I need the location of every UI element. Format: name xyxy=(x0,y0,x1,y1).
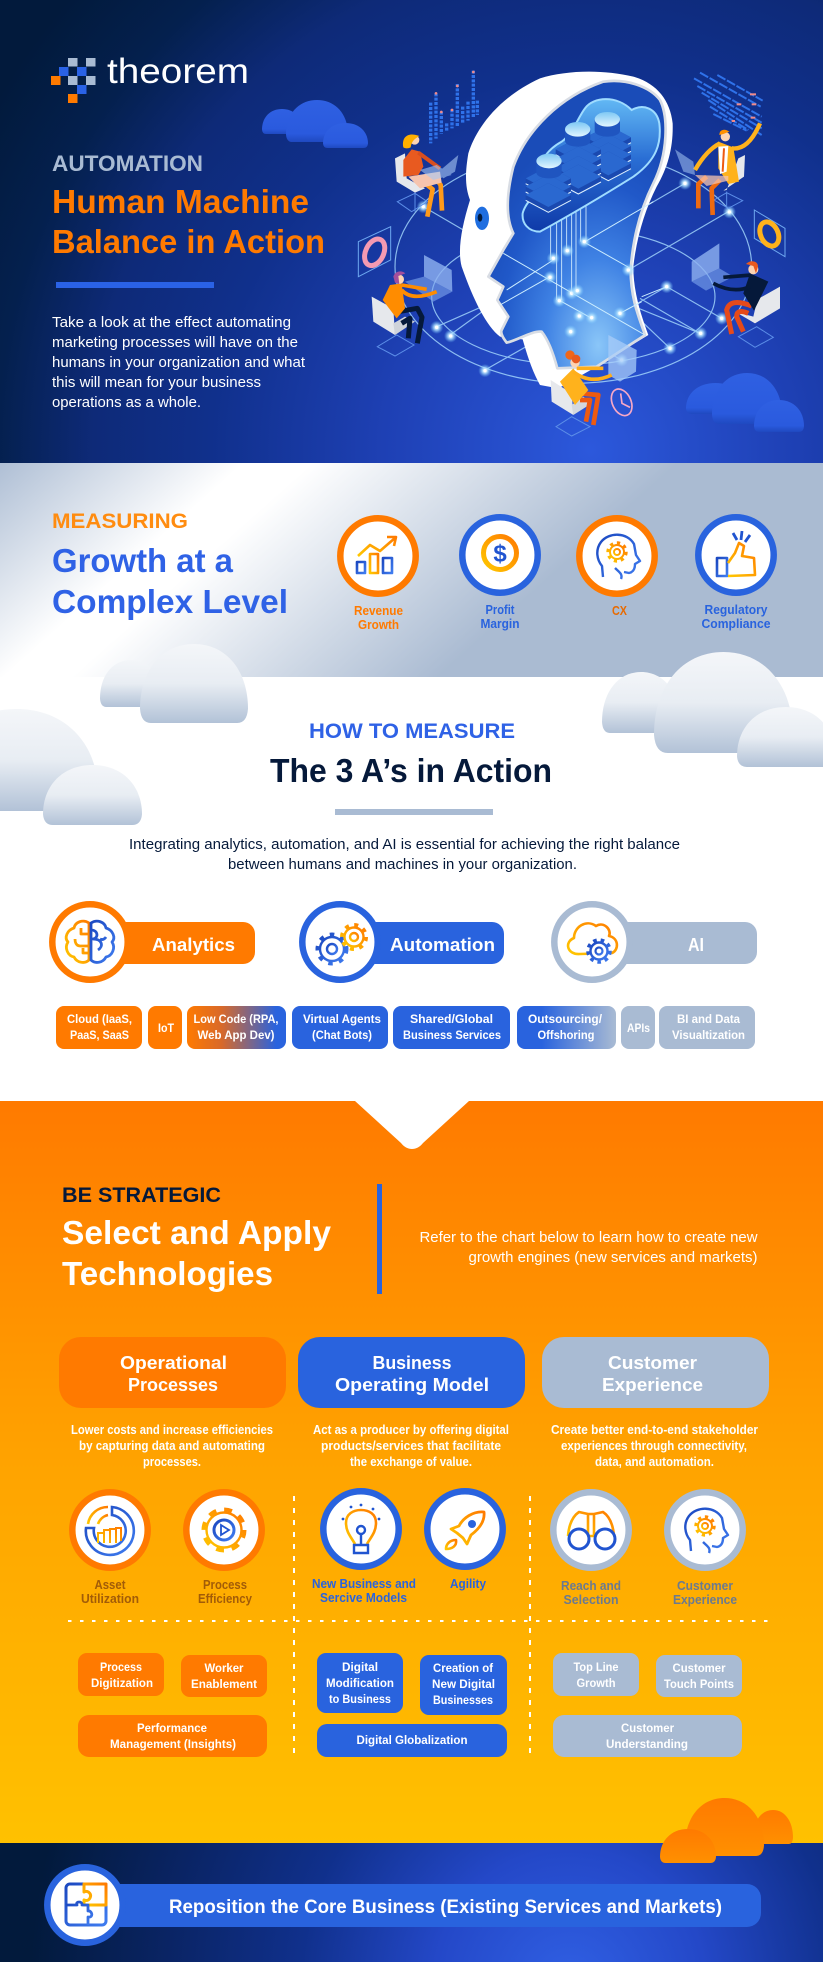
column descriptions: the exchange of value. xyxy=(350,1455,472,1469)
tags: business: Creation of xyxy=(433,1661,494,1675)
tags: business: to Business xyxy=(329,1692,391,1706)
person: woman top-left xyxy=(395,134,458,217)
capability: customer experience: Customer xyxy=(677,1578,733,1593)
column header: business operating model xyxy=(298,1337,525,1408)
eyebrow: automation: AUTOMATION xyxy=(52,151,203,176)
intro paragraph xyxy=(129,836,680,873)
tag row: technologies: IoT xyxy=(158,1021,175,1035)
capability: customer experience xyxy=(667,1492,743,1607)
data wires xyxy=(551,205,586,300)
icon: radial chart xyxy=(86,1507,134,1555)
tags: customer: Customer xyxy=(621,1721,674,1735)
capability: asset utilization: Asset xyxy=(94,1577,126,1592)
title: the 3 A's in action: The 3 A’s in Action xyxy=(270,752,552,789)
tags: operational: Management (Insights) xyxy=(110,1737,236,1751)
icon: gear with play xyxy=(204,1510,244,1550)
person: man left xyxy=(372,255,452,356)
capability: new business and service models xyxy=(312,1491,416,1605)
head silhouette xyxy=(460,72,673,388)
capability: process efficiency: Efficiency xyxy=(198,1591,253,1606)
title: growth at a complex level: Growth at a xyxy=(52,542,234,579)
tag row: technologies: Visualtization xyxy=(672,1028,745,1042)
icon: gears xyxy=(318,925,366,964)
metric: profit margin xyxy=(462,517,538,631)
title: select and apply technologies xyxy=(62,1214,332,1292)
tag row: technologies: Low Code (RPA, xyxy=(194,1012,278,1026)
capability: reach and selection: Reach and xyxy=(561,1578,621,1593)
icon: head with gear xyxy=(597,535,640,579)
column header: business operating model: Business xyxy=(372,1353,452,1373)
capability: customer experience: Experience xyxy=(673,1592,737,1607)
code block graphic xyxy=(694,73,763,135)
footer background xyxy=(0,1843,823,1962)
column header: business operating model: Operating Model xyxy=(335,1375,489,1395)
tag row: technologies: Outsourcing/ xyxy=(528,1012,603,1026)
hero title: Balance in Action xyxy=(52,223,325,260)
title: select and apply technologies: Technologies xyxy=(62,1255,273,1292)
hero paragraph: this will mean for your business xyxy=(52,374,261,391)
metric: profit margin: Profit xyxy=(486,602,515,617)
tags: operational: Performance xyxy=(137,1721,207,1735)
tag row: technologies: Virtual Agents xyxy=(303,1012,381,1026)
column descriptions: experiences through connectivity, xyxy=(561,1439,747,1453)
metric: revenue growth xyxy=(340,518,416,632)
capability: asset utilization: Utilization xyxy=(81,1591,139,1606)
orange section background with notch xyxy=(0,1101,823,1843)
metric: regulatory compliance xyxy=(698,517,774,631)
cloud: hero bottom xyxy=(686,373,804,432)
tags: operational: Enablement xyxy=(191,1677,257,1691)
eyebrow: be strategic: BE STRATEGIC xyxy=(62,1184,221,1207)
illustration: AI head with people and circuit xyxy=(358,71,785,436)
tag row: technologies: Shared/Global xyxy=(410,1012,493,1026)
inner circuit on face xyxy=(500,202,667,335)
white clouds left top xyxy=(100,644,248,723)
column descriptions: Lower costs and increase efficiencies xyxy=(71,1423,273,1437)
column descriptions: by capturing data and automating xyxy=(79,1439,265,1453)
hero paragraph: Take a look at the effect automating xyxy=(52,314,291,331)
ring panel right xyxy=(754,210,785,257)
logo: theorem xyxy=(51,52,249,103)
white clouds left xyxy=(0,709,142,825)
tag row: technologies: Web App Dev) xyxy=(198,1028,275,1042)
tags: customer: Touch Points xyxy=(664,1677,734,1691)
icon: head with gear xyxy=(685,1509,728,1553)
column header: customer experience xyxy=(542,1337,769,1408)
tag row: technologies: Business Services xyxy=(403,1028,501,1042)
capability: process efficiency xyxy=(186,1492,262,1606)
capability: new business and service models: Sercive Models xyxy=(320,1590,407,1605)
pill: automation: Automation xyxy=(390,935,495,955)
tags: business xyxy=(317,1653,507,1757)
tags: customer xyxy=(553,1653,742,1757)
hero paragraph xyxy=(52,314,306,411)
pill: ai: AI xyxy=(688,935,704,955)
column header: operational processes xyxy=(59,1337,286,1408)
pill: automation xyxy=(302,904,504,980)
column descriptions: Act as a producer by offering digital xyxy=(313,1423,509,1437)
eyebrow: how to measure: HOW TO MEASURE xyxy=(309,720,515,743)
title: growth at a complex level xyxy=(52,542,288,620)
band: measuring background xyxy=(0,463,823,677)
hero paragraph: humans in your organization and what xyxy=(52,354,306,371)
tag row: technologies: APIs xyxy=(627,1021,650,1035)
column descriptions xyxy=(71,1423,758,1469)
metric: cx xyxy=(579,518,655,618)
capability: process efficiency: Process xyxy=(203,1577,247,1592)
metric: revenue growth: Growth xyxy=(358,617,399,632)
circuit rings and lines xyxy=(395,150,752,383)
orange clouds xyxy=(660,1798,793,1863)
metric: profit margin: Margin xyxy=(480,616,520,631)
column descriptions: processes. xyxy=(143,1455,201,1469)
icon: bars and arrow xyxy=(357,537,396,573)
icon: thumbs up xyxy=(717,531,755,576)
hero paragraph: operations as a whole. xyxy=(52,394,201,411)
hero accent bar xyxy=(56,282,214,288)
capability: new business and service models: New Business and xyxy=(312,1576,416,1591)
chart intro text: growth engines (new services and markets) xyxy=(468,1249,758,1266)
pill: analytics xyxy=(52,904,255,980)
hero title: Human Machine xyxy=(52,183,309,220)
tags: business: Businesses xyxy=(433,1693,493,1707)
person: man top-right xyxy=(675,123,760,215)
bar cluster graphic xyxy=(431,71,477,143)
ring panel left xyxy=(358,227,391,277)
person: woman bottom xyxy=(551,335,637,436)
eyebrow: measuring: MEASURING xyxy=(52,510,188,533)
column descriptions: Create better end-to-end stakeholder xyxy=(551,1423,758,1437)
brain cloud with servers xyxy=(523,99,660,232)
chart intro text xyxy=(420,1229,758,1266)
person: man right xyxy=(692,243,780,347)
chart intro text: Refer to the chart below to learn how to create new xyxy=(420,1229,758,1246)
logo: theorem: theorem xyxy=(107,52,249,91)
pill: analytics: Analytics xyxy=(152,935,235,955)
icon: cloud gear xyxy=(568,923,617,962)
tag row: technologies: PaaS, SaaS xyxy=(70,1028,129,1042)
eye xyxy=(475,207,489,230)
capability: agility xyxy=(427,1491,503,1591)
icon: puzzle xyxy=(66,1884,106,1925)
icon: binoculars xyxy=(568,1512,615,1549)
tags: business: Digital xyxy=(342,1660,378,1674)
column header: customer experience: Experience xyxy=(602,1375,703,1395)
tags: customer: Top Line xyxy=(574,1660,619,1674)
metric: cx: CX xyxy=(612,603,627,618)
capability: asset utilization xyxy=(72,1492,148,1606)
capability: agility: Agility xyxy=(450,1576,487,1591)
tags: customer: Understanding xyxy=(606,1737,688,1751)
tag row: technologies xyxy=(56,1006,755,1049)
hero background xyxy=(0,0,823,463)
title: growth at a complex level: Complex Level xyxy=(52,583,288,620)
footer banner: reposition the core business xyxy=(47,1867,761,1943)
column descriptions: data, and automation. xyxy=(595,1455,714,1469)
capability: reach and selection xyxy=(553,1492,629,1607)
capability: reach and selection: Selection xyxy=(564,1592,619,1607)
metric: revenue growth: Revenue xyxy=(354,603,403,618)
tag row: technologies: Offshoring xyxy=(538,1028,594,1042)
metric: regulatory compliance: Regulatory xyxy=(704,602,768,617)
clock xyxy=(607,386,636,419)
tags: operational xyxy=(78,1653,267,1757)
icon: dollar coin: $ xyxy=(493,540,507,568)
cloud: hero top xyxy=(262,100,368,148)
tags: business: Digital Globalization xyxy=(356,1733,468,1747)
circuit nodes xyxy=(417,177,736,377)
title divider xyxy=(335,809,493,815)
hero title xyxy=(52,183,325,260)
icon: rocket xyxy=(446,1512,484,1549)
column header: operational processes: Processes xyxy=(128,1375,218,1395)
tag row: technologies: (Chat Bots) xyxy=(312,1028,372,1042)
icon: light bulb xyxy=(342,1504,380,1553)
column descriptions: products/services that facilitate xyxy=(321,1439,501,1453)
title: select and apply technologies: Select and Apply xyxy=(62,1214,332,1251)
metric: regulatory compliance: Compliance xyxy=(702,616,770,631)
tags: operational: Worker xyxy=(204,1661,244,1675)
tags: customer: Customer xyxy=(672,1661,726,1675)
white clouds right xyxy=(602,652,823,767)
intro paragraph: Integrating analytics, automation, and AI is essential for achieving the right balance xyxy=(129,836,680,853)
tags: customer: Growth xyxy=(576,1676,616,1690)
vertical divider xyxy=(377,1184,382,1294)
footer banner: reposition the core business: Reposition the Core Business (Existing Services and Markets) xyxy=(169,1897,722,1918)
tag row: technologies: Cloud (IaaS, xyxy=(67,1012,132,1026)
tags: operational: Process xyxy=(100,1660,142,1674)
column header: customer experience: Customer xyxy=(608,1353,697,1373)
column header: operational processes: Operational xyxy=(120,1353,227,1373)
tag row: technologies: BI and Data xyxy=(677,1012,740,1026)
tags: business: Modification xyxy=(326,1676,394,1690)
intro paragraph: between humans and machines in your organization. xyxy=(228,856,577,873)
pill: ai xyxy=(554,904,757,980)
icon: brain xyxy=(66,921,114,962)
tags: business: New Digital xyxy=(432,1677,495,1691)
hero paragraph: marketing processes will have on the xyxy=(52,334,298,351)
tags: operational: Digitization xyxy=(91,1676,153,1690)
